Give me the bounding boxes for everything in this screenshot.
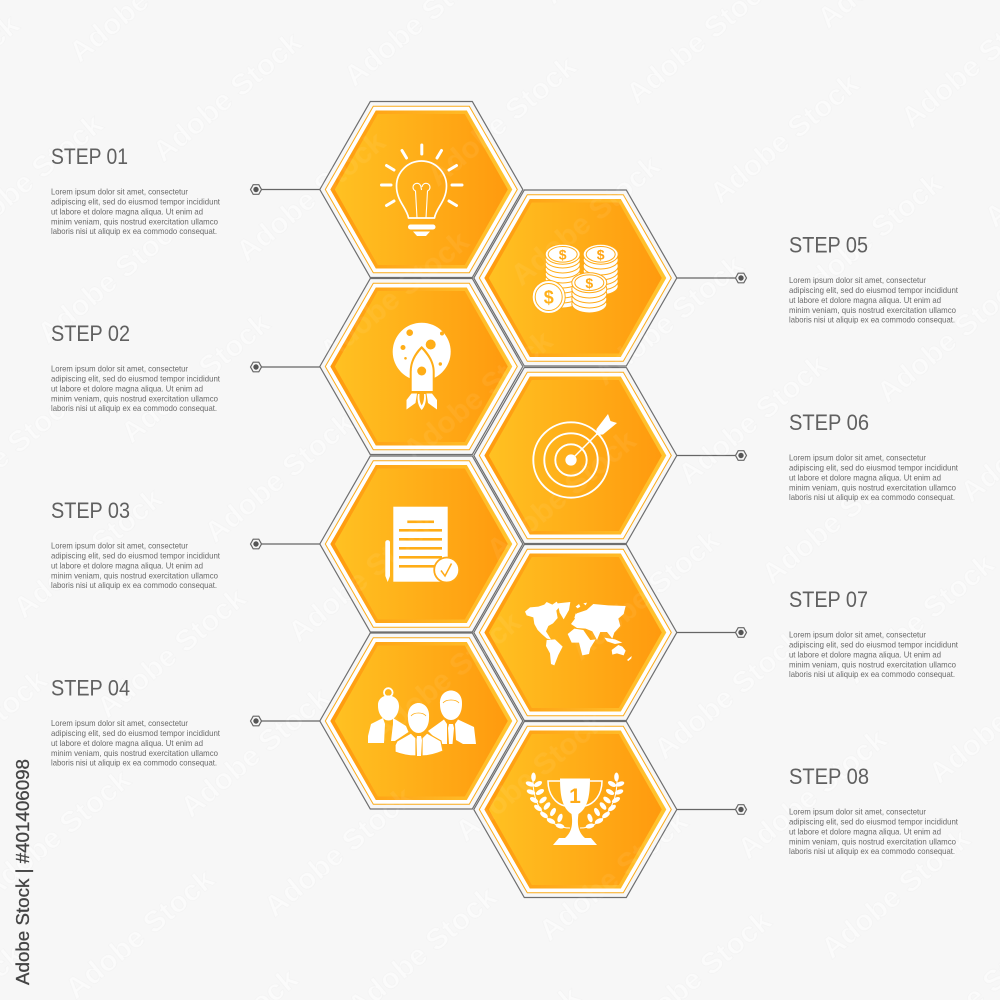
text block: step 03: STEP 03 <box>51 498 130 523</box>
person: man center <box>395 703 443 756</box>
text block: step 05: laboris nisi ut aliquip ex ea commodo consequat. <box>789 315 955 325</box>
text block: step 06: minim veniam, quis nostrud exercitation ullamco <box>789 482 956 492</box>
connector: step 03 <box>250 539 320 549</box>
text block: step 03: adipiscing elit, sed do eiusmod tempor incididunt <box>51 550 221 560</box>
text block: step 01: STEP 01 <box>51 144 128 169</box>
text block: step 01: ut labore et dolore magna aliqua. Ut enim ad <box>51 206 203 216</box>
text block: step 02: minim veniam, quis nostrud exercitation ullamco <box>51 393 218 403</box>
icon: target with arrow <box>533 414 617 498</box>
text block: step 08: STEP 08 <box>789 764 869 789</box>
text block: step 05: ut labore et dolore magna aliqua. Ut enim ad <box>789 295 941 305</box>
text block: step 08 <box>789 764 959 856</box>
text block: step 03: minim veniam, quis nostrud exercitation ullamco <box>51 570 218 580</box>
text block: step 04: adipiscing elit, sed do eiusmod tempor incididunt <box>51 728 221 738</box>
text block: step 03: laboris nisi ut aliquip ex ea commodo consequat. <box>51 580 217 590</box>
icon: coin stacks: $ <box>559 246 567 262</box>
text block: step 07: minim veniam, quis nostrud exercitation ullamco <box>789 659 956 669</box>
icon: trophy with laurel <box>525 772 625 845</box>
text block: step 06: laboris nisi ut aliquip ex ea commodo consequat. <box>789 492 955 502</box>
text block: step 08: Lorem ipsum dolor sit amet, consectetur <box>789 806 926 816</box>
text block: step 01: adipiscing elit, sed do eiusmod tempor incididunt <box>51 196 221 206</box>
hexagon: step 03 <box>320 456 523 632</box>
coin stack left <box>545 244 580 308</box>
text block: step 03: Lorem ipsum dolor sit amet, consectetur <box>51 540 188 550</box>
text block: step 02: ut labore et dolore magna aliqua. Ut enim ad <box>51 383 203 393</box>
hexagon: step 04 <box>320 633 523 809</box>
connector: step 04 <box>250 716 320 726</box>
text block: step 01 <box>51 144 221 236</box>
text block: step 04: laboris nisi ut aliquip ex ea commodo consequat. <box>51 758 217 768</box>
text block: step 04 <box>51 676 221 768</box>
hexagon: step 01 <box>320 102 523 278</box>
coin stack right <box>583 244 618 295</box>
person: man right <box>428 690 476 744</box>
text block: step 07: Lorem ipsum dolor sit amet, consectetur <box>789 630 926 640</box>
connector: step 05 <box>677 273 746 283</box>
text block: step 01: Lorem ipsum dolor sit amet, consectetur <box>51 186 188 196</box>
text block: step 02: adipiscing elit, sed do eiusmod tempor incididunt <box>51 374 221 384</box>
text block: step 06 <box>789 410 959 502</box>
text block: step 08: ut labore et dolore magna aliqua. Ut enim ad <box>789 826 941 836</box>
text block: step 08: minim veniam, quis nostrud exercitation ullamco <box>789 836 956 846</box>
text block: step 07: laboris nisi ut aliquip ex ea commodo consequat. <box>789 669 955 679</box>
icon: light bulb <box>382 145 462 236</box>
text block: step 06: Lorem ipsum dolor sit amet, consectetur <box>789 452 926 462</box>
hexagon: step 05 <box>474 190 677 366</box>
stock image credit: Adobe Stock | #401406098 <box>13 759 33 985</box>
laurel right <box>580 772 625 829</box>
text block: step 07: ut labore et dolore magna aliqua. Ut enim ad <box>789 649 941 659</box>
text block: step 05: adipiscing elit, sed do eiusmod tempor incididunt <box>789 285 959 295</box>
text block: step 05: STEP 05 <box>789 232 868 258</box>
connector: step 02 <box>250 362 320 372</box>
icon: coin stacks: $ <box>597 246 605 262</box>
text block: step 06: ut labore et dolore magna aliqua. Ut enim ad <box>789 472 941 482</box>
text block: step 01: minim veniam, quis nostrud exercitation ullamco <box>51 216 218 226</box>
text block: step 07: adipiscing elit, sed do eiusmod tempor incididunt <box>789 640 959 650</box>
person: woman <box>368 688 408 743</box>
coin stack front <box>572 273 607 313</box>
icon: team of three people <box>368 688 476 756</box>
icon: world map <box>525 602 632 665</box>
hexagon: step 07 <box>474 544 677 720</box>
connector: step 06 <box>677 451 746 460</box>
icon: coin stacks <box>532 244 618 314</box>
text block: step 02: Lorem ipsum dolor sit amet, consectetur <box>51 364 188 374</box>
single coin: $ <box>544 288 554 308</box>
icon: trophy with laurel: 1 <box>569 785 581 808</box>
text block: step 04: minim veniam, quis nostrud exercitation ullamco <box>51 748 218 758</box>
connector: step 07 <box>677 628 746 637</box>
text block: step 04: ut labore et dolore magna aliqua. Ut enim ad <box>51 738 203 748</box>
text block: step 01: laboris nisi ut aliquip ex ea commodo consequat. <box>51 226 217 236</box>
text block: step 08: laboris nisi ut aliquip ex ea commodo consequat. <box>789 846 955 856</box>
text block: step 08: adipiscing elit, sed do eiusmod tempor incididunt <box>789 816 959 826</box>
hexagon: step 02 <box>320 278 523 454</box>
text block: step 06: STEP 06 <box>789 410 869 435</box>
text block: step 04: STEP 04 <box>51 676 130 700</box>
text block: step 04: Lorem ipsum dolor sit amet, consectetur <box>51 718 188 728</box>
text block: step 02 <box>51 321 221 413</box>
icon: rocket and moon <box>393 323 451 410</box>
text block: step 05: Lorem ipsum dolor sit amet, consectetur <box>789 275 926 285</box>
connector: step 08 <box>677 805 746 814</box>
text block: step 03: ut labore et dolore magna aliqua. Ut enim ad <box>51 560 203 570</box>
icon: coin stacks: $ <box>585 275 593 291</box>
text block: step 06: adipiscing elit, sed do eiusmod tempor incididunt <box>789 462 959 472</box>
text block: step 07: STEP 07 <box>789 587 868 612</box>
text block: step 05 <box>789 232 959 325</box>
text block: step 02: STEP 02 <box>51 321 130 346</box>
connector: step 01 <box>250 185 320 194</box>
text block: step 05: minim veniam, quis nostrud exercitation ullamco <box>789 305 956 315</box>
icon: document with pen and check mark <box>385 507 459 582</box>
text block: step 03 <box>51 498 221 590</box>
text block: step 02: laboris nisi ut aliquip ex ea commodo consequat. <box>51 403 217 413</box>
text block: step 07 <box>789 587 959 679</box>
hexagon: step 08 <box>474 722 677 898</box>
hexagon: step 06 <box>474 368 677 544</box>
laurel left <box>525 772 570 829</box>
